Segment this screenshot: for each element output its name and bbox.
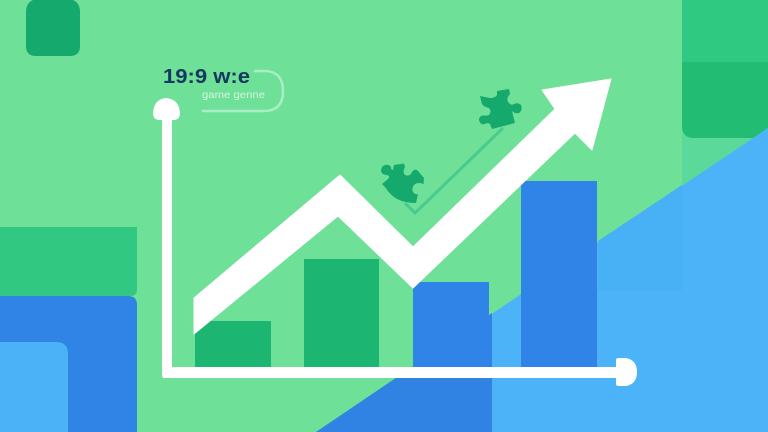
bar 4 — [521, 181, 597, 368]
panel: left green block — [0, 227, 137, 296]
heading: 19:9 w:e — [163, 66, 250, 88]
subheading: game genne — [202, 89, 265, 101]
bar 1 — [195, 321, 271, 368]
panel: left blue block — [0, 296, 137, 432]
bar 3 — [413, 282, 489, 368]
panel: translucent blue overlay — [598, 185, 682, 291]
panel: top left rounded square — [26, 0, 80, 56]
icon: lower puzzle piece — [381, 164, 424, 203]
panel: left light blue block — [0, 342, 68, 432]
connector line between puzzle pieces — [405, 128, 503, 213]
callout bracket — [203, 71, 283, 111]
panel: diagonal light blue area — [316, 128, 768, 432]
panel: diagonal dark blue area — [316, 313, 492, 432]
icon: upper puzzle piece — [479, 89, 522, 129]
panel: top right green block — [682, 0, 768, 138]
growth arrow — [194, 79, 611, 334]
panel: right pale green band — [682, 130, 768, 200]
bar chart — [195, 181, 597, 368]
bar 2 — [304, 259, 379, 368]
chart axes — [153, 98, 637, 386]
